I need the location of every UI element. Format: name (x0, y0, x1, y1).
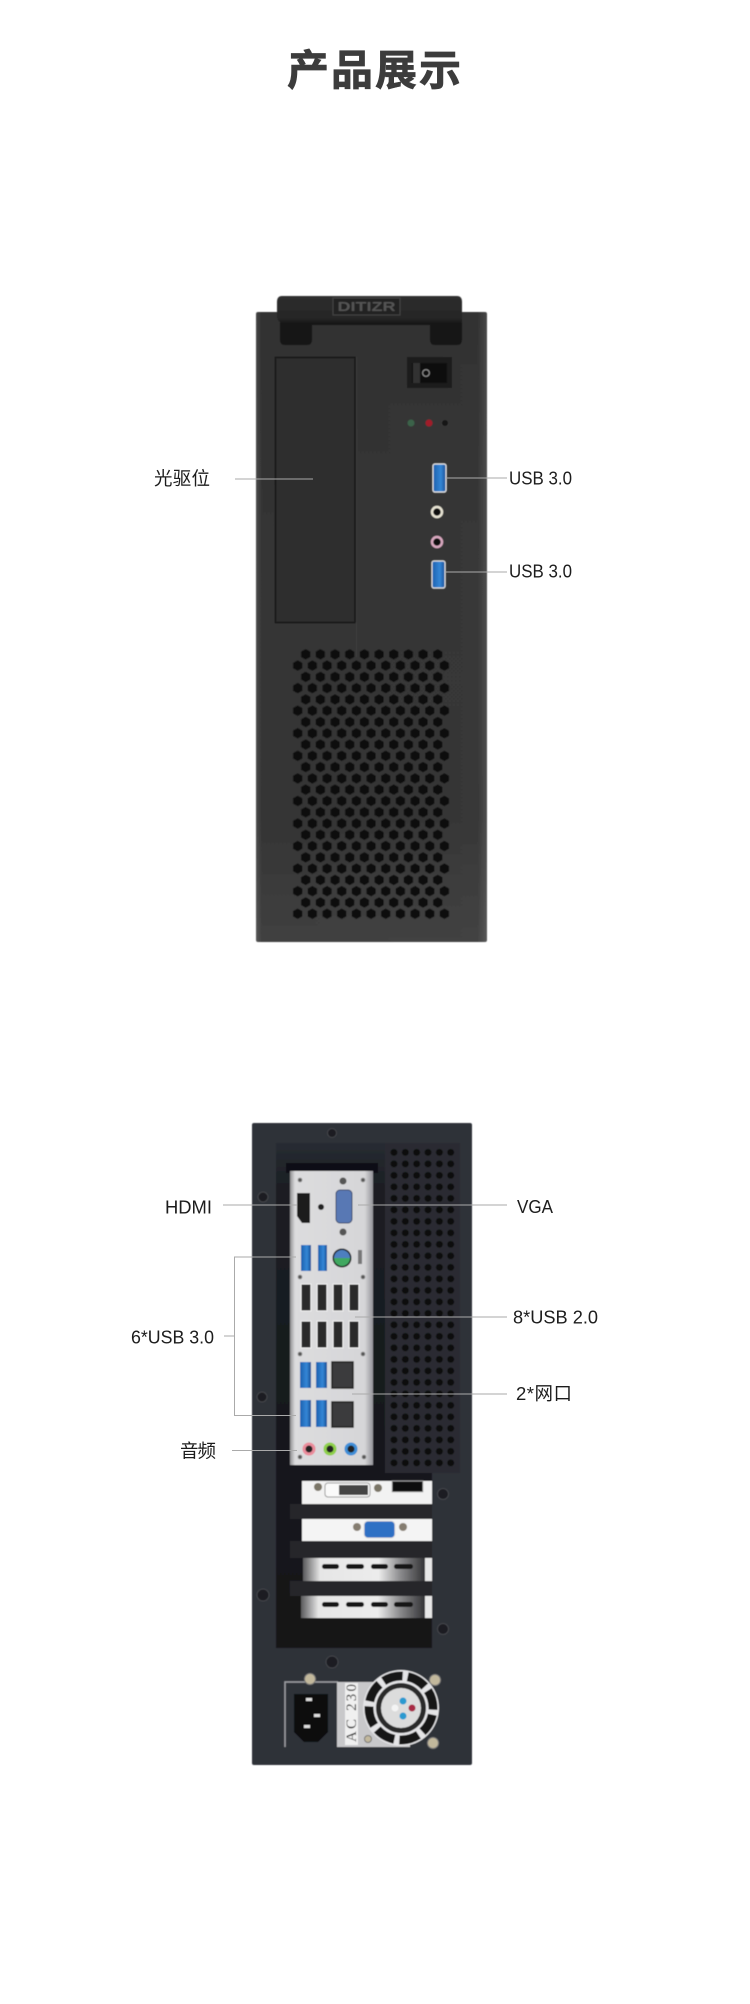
IO shield (290, 1171, 373, 1465)
front USB port lower (432, 561, 445, 588)
blank slot 3 (303, 1558, 432, 1581)
label: front USB lower: USB 3.0 (509, 560, 572, 582)
front audio jack (432, 507, 442, 517)
label: HDMI: HDMI (165, 1196, 212, 1218)
label: 2 network ports: 2*网口 (516, 1383, 572, 1404)
PS/2 port (332, 1248, 352, 1268)
label: 6 USB 3.0 with bracket: 6*USB 3.0 (131, 1326, 214, 1348)
carrying handle: DITIZR (338, 299, 396, 314)
rear view of computer case (252, 1123, 472, 1765)
rear screws (257, 1128, 448, 1668)
expansion card 2: VGA (302, 1519, 432, 1541)
fan guard (363, 1670, 439, 1746)
front view of computer case (256, 296, 487, 942)
label: optical bay: 光驱位 (154, 468, 210, 489)
power supply (285, 1670, 440, 1748)
indicator lights (408, 420, 448, 426)
network ports (332, 1362, 353, 1427)
silver plate (337, 1682, 410, 1747)
rear USB 3.0 top pair (301, 1245, 327, 1271)
label: VGA: VGA (517, 1196, 554, 1217)
rear case body (252, 1123, 472, 1765)
audio jacks (304, 1444, 356, 1454)
blank slot 4 (301, 1596, 432, 1618)
psu thumbscrews (304, 1674, 440, 1748)
title: 产品展示 (287, 47, 463, 94)
label: 8 USB 2.0: 8*USB 2.0 (513, 1306, 598, 1328)
HDMI port (297, 1193, 310, 1223)
label: front USB lower (445, 560, 572, 582)
honeycomb vent (290, 643, 452, 925)
dark rear well (276, 1143, 432, 1648)
front mic jack (432, 537, 442, 547)
perforated side panel (385, 1143, 460, 1473)
mounting holes (298, 1178, 366, 1459)
label: 6 USB 3.0 with bracket (131, 1257, 296, 1416)
USB 3.0 lower ports (300, 1362, 327, 1427)
slot bands (290, 1504, 432, 1596)
inlet bracket (285, 1682, 338, 1747)
label: front USB upper (446, 468, 572, 488)
power switch (407, 357, 452, 388)
port icon (358, 1250, 362, 1264)
VGA port (336, 1178, 352, 1236)
label: front USB upper: USB 3.0 (509, 468, 572, 488)
label: HDMI (165, 1196, 297, 1218)
small hole (318, 1204, 324, 1210)
front USB port upper (433, 464, 446, 492)
optical drive bay (276, 358, 355, 622)
USB 2.0 ports (301, 1284, 359, 1348)
label: audio: 音频 (180, 1440, 216, 1462)
front case body (256, 312, 487, 942)
AC 230 label: AC 230 (344, 1684, 360, 1742)
carrying handle (277, 296, 462, 345)
AC power inlet (294, 1694, 328, 1742)
expansion card 1: DVI and HDMI (302, 1481, 432, 1504)
label: audio (180, 1440, 297, 1462)
